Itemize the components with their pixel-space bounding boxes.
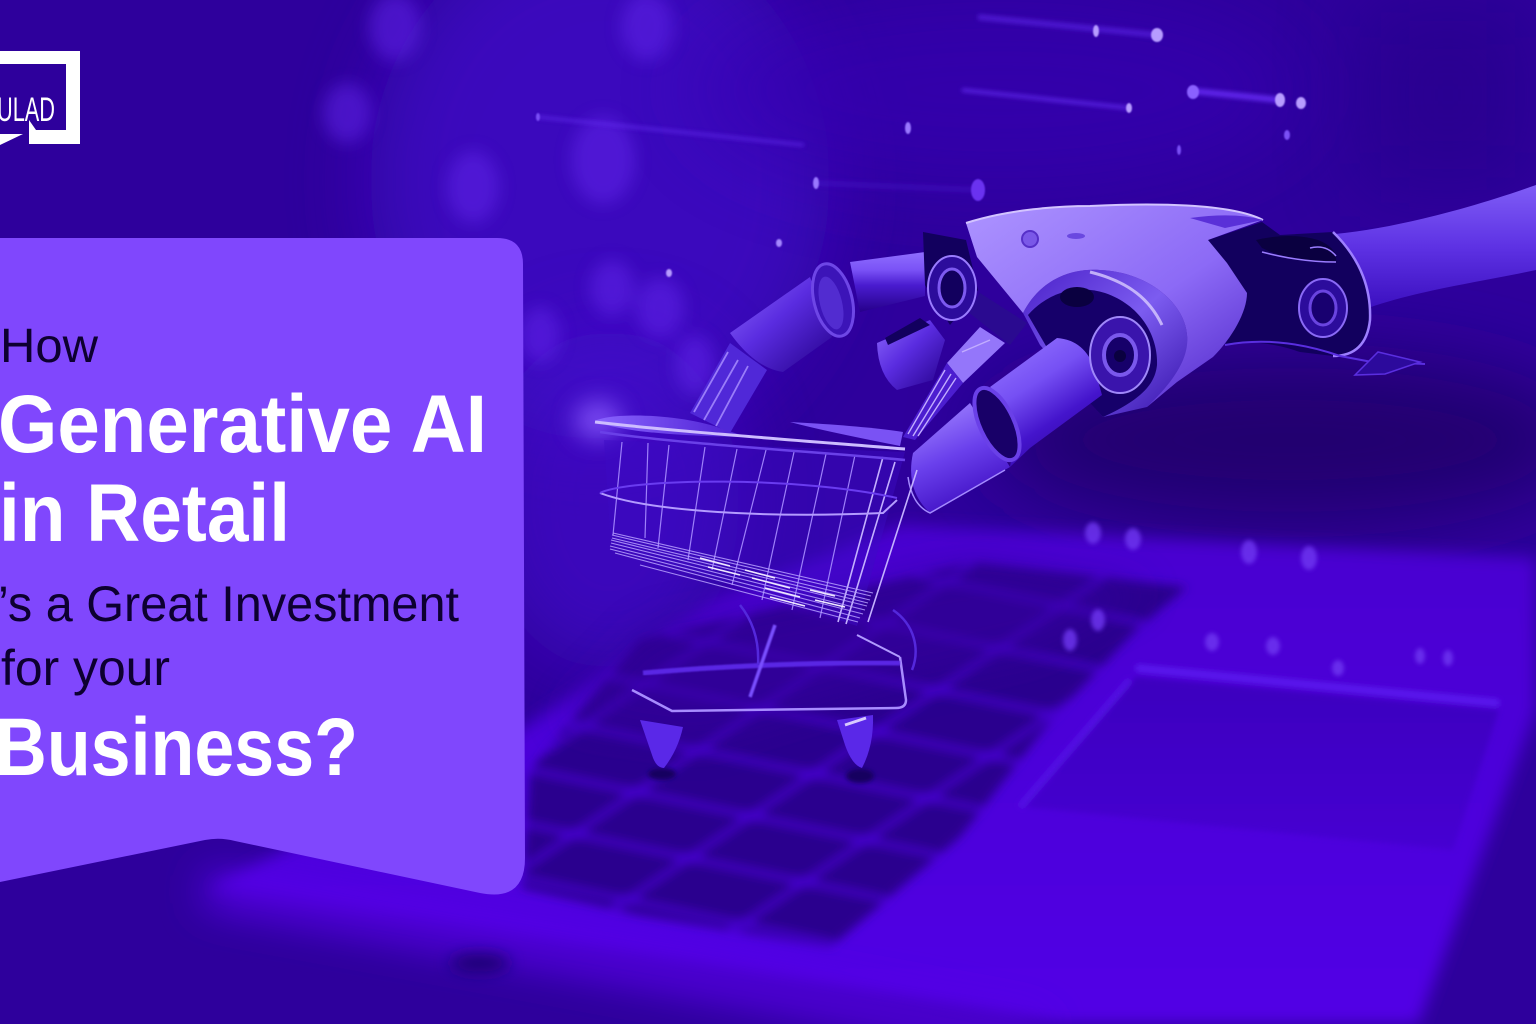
- logo frame: [0, 51, 80, 144]
- heading: Generative AI: Generative AI: [0, 379, 487, 470]
- upper finger: [690, 252, 925, 433]
- cart bottom mesh: [610, 533, 873, 622]
- front edge highlight: [205, 888, 1040, 1024]
- cart basket: [600, 440, 917, 626]
- underside shadow: [450, 954, 510, 972]
- keyboard: [522, 563, 1187, 947]
- title panel: [0, 238, 525, 895]
- front finger: [908, 317, 1150, 513]
- shopping cart: [574, 400, 917, 783]
- logo tail: [0, 134, 23, 145]
- laptop body: [210, 525, 1536, 1024]
- cart glow: [574, 400, 622, 440]
- subheading: for your: for your: [1, 640, 170, 696]
- cart wheels: [640, 715, 874, 783]
- heading: How: How: [0, 320, 98, 373]
- panel shape: [0, 238, 525, 895]
- logo: [0, 51, 80, 145]
- bokeh lights and data streaks: [323, 0, 1306, 395]
- cart undercarriage: [632, 605, 916, 711]
- laptop: [205, 522, 1536, 1024]
- trackpad: [1020, 668, 1499, 850]
- middle finger: [877, 293, 1027, 440]
- palm: [923, 204, 1263, 417]
- cart rim: [595, 416, 747, 437]
- heading: in Retail: in Retail: [0, 468, 290, 559]
- subheading: great investment: ’s a Great Investment: [0, 576, 459, 632]
- wrist with joint: [1208, 222, 1425, 375]
- keyboard rear shade: [560, 563, 1150, 740]
- heading: Business?: Business?: [0, 702, 358, 793]
- forearm: [1335, 185, 1536, 308]
- robot hand: [690, 185, 1536, 513]
